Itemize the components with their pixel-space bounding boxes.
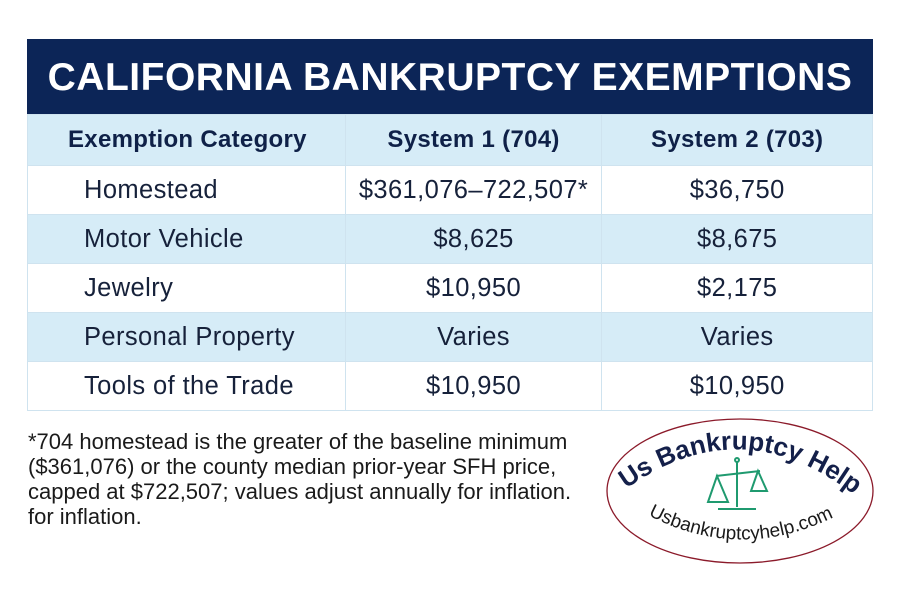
- table: exemptions: System 1 (704): [387, 126, 560, 153]
- footnote: *704 homestead is the greater of the baseline minimum: [28, 429, 567, 454]
- table: exemptions: $10,950: [426, 372, 521, 400]
- footnote: ($361,076) or the county median prior-year SFH price,: [28, 454, 556, 479]
- table: exemptions: System 2 (703): [651, 126, 823, 153]
- table: exemptions: Homestead: [84, 176, 218, 204]
- footnote: [28, 429, 571, 529]
- table: exemptions: $10,950: [426, 274, 521, 302]
- logo: Us Bankruptcy Help: Usbankruptcyhelp.com: [650, 504, 833, 544]
- table: exemptions: $2,175: [697, 274, 777, 302]
- icon: scales: [708, 458, 767, 509]
- table: exemptions: $36,750: [690, 176, 785, 204]
- footnote: for inflation.: [28, 504, 142, 529]
- logo: Us Bankruptcy Help: [606, 418, 874, 564]
- table: exemptions: Varies: [701, 322, 774, 350]
- table: exemptions: Personal Property: [84, 322, 295, 350]
- table: exemptions: Motor Vehicle: [84, 224, 244, 252]
- table: exemptions: Tools of the Trade: [84, 372, 294, 400]
- table: exemptions: Jewelry: [84, 274, 173, 302]
- table: exemptions: [27, 114, 873, 411]
- title: [27, 39, 873, 114]
- table: exemptions: Varies: [437, 322, 510, 350]
- logo: Us Bankruptcy Help: Us Bankruptcy Help: [618, 432, 860, 493]
- table: exemptions: $8,625: [433, 224, 514, 252]
- table: exemptions: Exemption Category: [68, 126, 307, 153]
- table: exemptions: $361,076–722,507*: [359, 176, 588, 204]
- table: exemptions: $8,675: [697, 224, 777, 252]
- table: exemptions: $10,950: [690, 372, 785, 400]
- footnote: capped at $722,507; values adjust annually for inflation.: [28, 479, 571, 504]
- title: CALIFORNIA BANKRUPTCY EXEMPTIONS: [48, 56, 852, 99]
